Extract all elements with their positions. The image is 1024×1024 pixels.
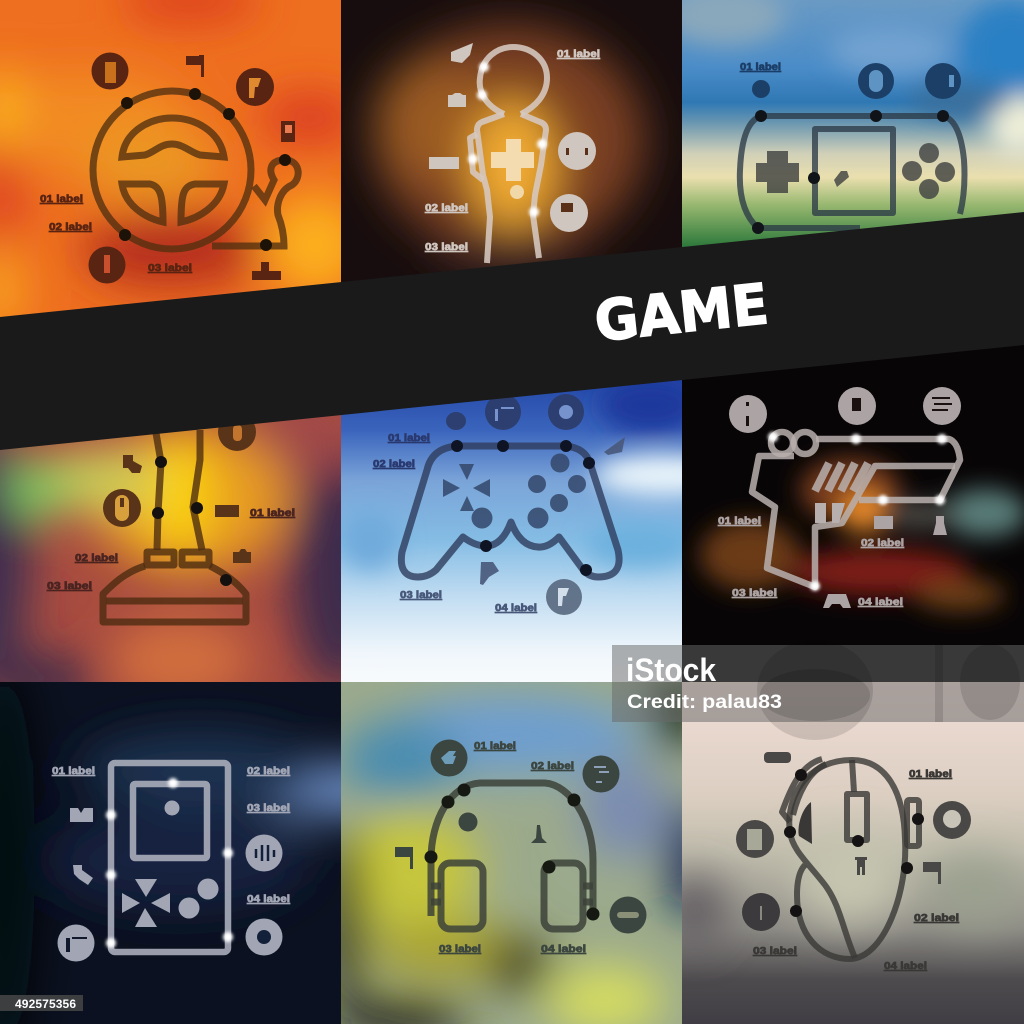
- icons around mouse: [736, 752, 971, 931]
- watermark: iStock credit box: iStock: [626, 652, 716, 688]
- black diagonal band: [0, 212, 1024, 450]
- dots: [152, 456, 232, 586]
- panel: handheld console background: [682, 0, 1024, 247]
- panel: headphones background: [341, 682, 682, 1024]
- icon diagram: computer mouse: [782, 759, 924, 959]
- labels: handheld: 02 label: [247, 766, 290, 777]
- labels: mouse: 03 label: [753, 946, 797, 957]
- dots: [424, 784, 600, 920]
- labels: gun: 03 label: [732, 588, 777, 599]
- labels: gamepad lower: [400, 590, 537, 614]
- labels: gamepad lower: 04 label: [495, 603, 537, 614]
- image id tag: 492575356: [15, 997, 76, 1011]
- glowing dots: [768, 432, 947, 591]
- icons around figure: [429, 43, 596, 232]
- panel: handheld game background: [0, 682, 341, 1024]
- labels: figure: 02 label: [425, 203, 468, 214]
- labels: gamepad: 02 label: [373, 459, 415, 470]
- labels: steering wheel: 03 label: [148, 263, 192, 274]
- cross: [491, 139, 534, 181]
- labels: gun: 04 label: [858, 597, 903, 608]
- labels: gamepad: 01 label: [388, 433, 430, 444]
- labels: headphones: 04 label: [541, 944, 586, 955]
- labels: gamepad: [373, 433, 430, 470]
- labels: figure: 03 label: [425, 242, 468, 253]
- labels: joystick: 02 label: [75, 553, 118, 564]
- labels: joystick: 01 label: [250, 508, 295, 519]
- labels: gun: [718, 516, 904, 608]
- labels: mouse: 02 label: [914, 913, 959, 924]
- labels: gun: 01 label: [718, 516, 761, 527]
- labels: steering wheel: [40, 194, 192, 274]
- title: GAME: [592, 272, 772, 355]
- labels: steering wheel: 02 label: [49, 222, 92, 233]
- icon diagram: figure with controller: [468, 47, 547, 263]
- labels: headphones: [439, 741, 586, 955]
- dots: [451, 440, 595, 576]
- labels: headphones: 02 label: [531, 761, 574, 772]
- labels: joystick: 03 label: [47, 581, 92, 592]
- icon diagram: joystick: [103, 430, 246, 622]
- icon diagram: headphones: [424, 783, 600, 929]
- icon diagram: handheld game: [106, 763, 233, 952]
- glowing dots: [106, 778, 233, 948]
- icons around handheld: [58, 808, 282, 962]
- icon diagram: steering wheel: [93, 88, 298, 251]
- panel: light gun background: [682, 345, 1024, 645]
- label: console: 01 label: [740, 62, 781, 73]
- icons and labels around joystick: [103, 413, 256, 563]
- labels: mouse: [753, 769, 959, 972]
- icons around steering wheel: [88, 52, 295, 284]
- icon diagram: handheld console: [740, 110, 964, 234]
- icons around console: [752, 63, 961, 99]
- panel: figure with controller background: [341, 0, 682, 274]
- panel: steering wheel background: [0, 0, 341, 317]
- icon diagram: light gun: [752, 432, 960, 591]
- labels: handheld: 01 label: [52, 766, 95, 777]
- labels: mouse: 01 label: [909, 769, 952, 780]
- labels: mouse: 04 label: [884, 961, 927, 972]
- panel: gamepad background: [341, 380, 682, 682]
- labels: gun: 02 label: [861, 538, 904, 549]
- dots: [784, 769, 924, 917]
- dots: [119, 88, 291, 251]
- labels: figure: 01 label: [557, 49, 600, 60]
- labels: handheld: 03 label: [247, 803, 290, 814]
- labels: gamepad lower: 03 label: [400, 590, 442, 601]
- dots: [752, 110, 949, 234]
- icon diagram: gamepad: [401, 440, 619, 577]
- labels: handheld: [52, 766, 290, 905]
- watermark: iStock credit box: [612, 640, 1024, 740]
- labels: headphones: 03 label: [439, 944, 481, 955]
- labels: handheld: 04 label: [247, 894, 290, 905]
- icons around headphones: [395, 740, 646, 934]
- image id tag: [0, 995, 83, 1011]
- glowing dots: [468, 62, 547, 217]
- watermark: iStock credit box: Credit: palau83: [627, 692, 782, 713]
- labels: headphones: 01 label: [474, 741, 516, 752]
- labels: steering wheel: 01 label: [40, 194, 83, 205]
- labels: figure: [425, 49, 600, 253]
- icons around gamepad: [446, 394, 625, 615]
- panel: computer mouse background: [665, 682, 1024, 1024]
- icons around gun: [729, 387, 961, 608]
- panel: joystick background: [0, 415, 341, 682]
- labels: joystick: [47, 508, 295, 592]
